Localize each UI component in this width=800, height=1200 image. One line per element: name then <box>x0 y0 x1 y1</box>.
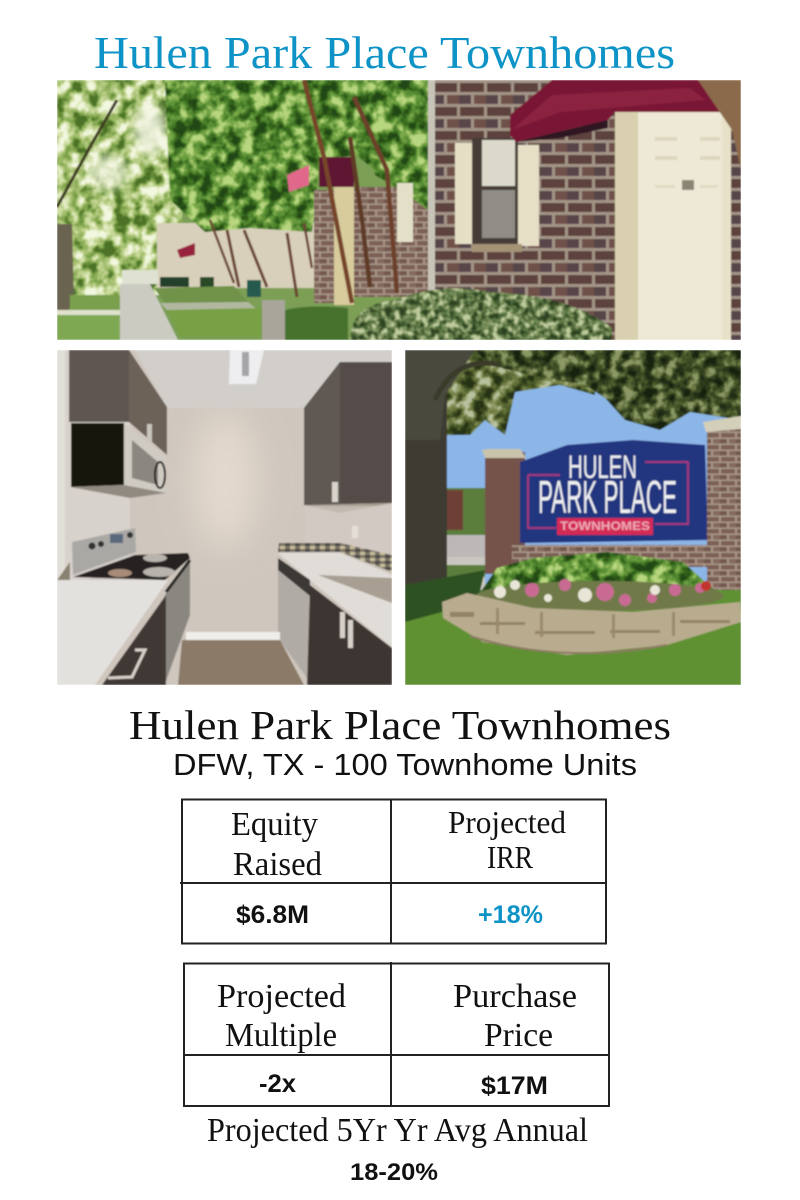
equity raised label: Raised <box>233 846 322 883</box>
purchase price label: Purchase <box>453 978 577 1015</box>
photo: kitchen <box>57 350 392 685</box>
photo: entrance sign: HULEN <box>568 449 637 485</box>
projected IRR label <box>448 804 566 875</box>
projected multiple value: -2x <box>259 1070 296 1098</box>
projected IRR value: +18% <box>478 901 543 929</box>
purchase price label: Price <box>484 1017 553 1054</box>
heading: property name: Hulen Park Place Townhomes <box>129 702 671 748</box>
table: equity raised and projected IRR <box>180 799 606 944</box>
value: annual return range: 18-20% <box>350 1159 438 1186</box>
subheading: location and units: DFW, TX - 100 Townhome Units <box>173 747 637 782</box>
photo: entrance sign: TOWNHOMES <box>560 519 650 533</box>
label: projected average annual: Projected 5Yr Yr Avg Annual <box>207 1112 588 1149</box>
photo: entrance sign <box>405 350 741 685</box>
projected multiple label <box>217 978 346 1054</box>
equity raised value: $6.8M <box>236 901 309 929</box>
projected IRR label: IRR <box>487 839 534 875</box>
projected multiple label: Projected <box>217 978 346 1015</box>
purchase price label <box>453 978 577 1054</box>
purchase price value: $17M <box>481 1072 548 1100</box>
title: Hulen Park Place Townhomes <box>94 27 675 78</box>
photo: townhome exterior <box>57 80 741 340</box>
equity raised label <box>231 806 322 883</box>
equity raised label: Equity <box>231 806 318 843</box>
projected multiple label: Multiple <box>225 1017 337 1054</box>
projected IRR label: Projected <box>448 804 566 840</box>
table: projected multiple and purchase price <box>184 962 609 1106</box>
